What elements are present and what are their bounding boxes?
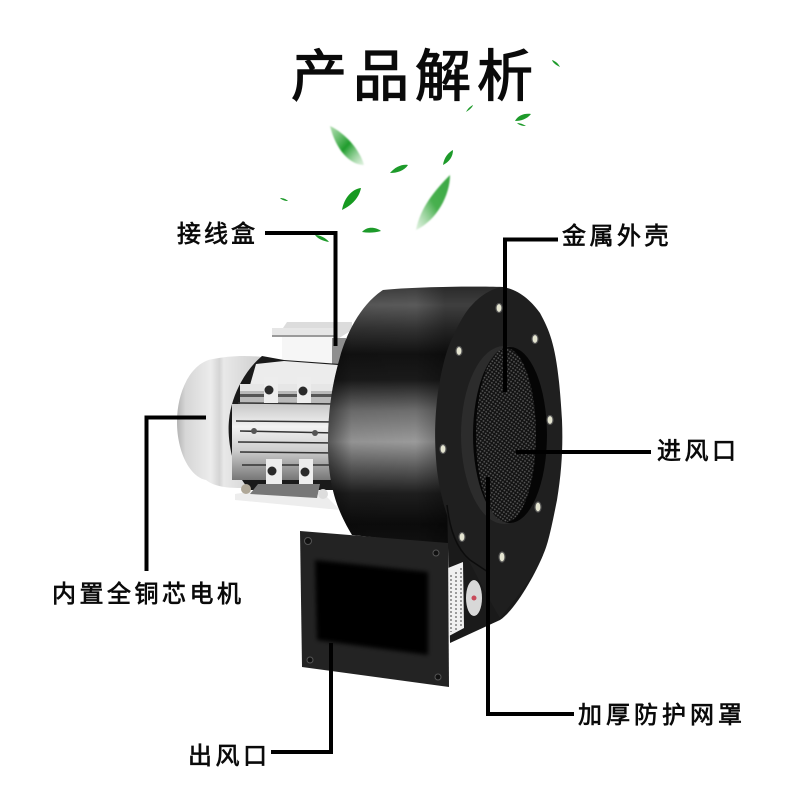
callout: 内置全铜芯电机	[52, 418, 244, 608]
green leaves	[280, 60, 560, 242]
callout: 出风口	[188, 643, 331, 770]
callout: 进风口: 进风口	[657, 438, 740, 465]
callout: 接线盒	[177, 221, 336, 346]
callout: 加厚防护网罩	[488, 477, 746, 729]
motor foot	[235, 484, 340, 510]
title: 产品解析	[291, 45, 539, 108]
blower housing	[328, 287, 562, 643]
bolts	[440, 304, 553, 562]
plate inner curve	[447, 505, 488, 572]
callout: 金属外壳	[505, 223, 672, 392]
side labels on housing	[448, 562, 482, 636]
terminal box	[272, 322, 352, 364]
fan cover	[177, 356, 262, 488]
outlet flange	[300, 531, 449, 687]
inlet recess	[461, 346, 547, 524]
housing body	[328, 287, 503, 570]
callout: 金属外壳: 金属外壳	[562, 223, 672, 250]
front plate	[435, 287, 562, 618]
lower scroll	[447, 500, 555, 643]
cooling fins	[229, 356, 340, 490]
callout: 加厚防护网罩: 加厚防护网罩	[578, 702, 746, 729]
motor	[177, 322, 352, 510]
callout: 出风口: 出风口	[188, 743, 270, 770]
outlet opening	[315, 560, 428, 655]
callout: 接线盒: 接线盒	[177, 221, 258, 248]
callout: 内置全铜芯电机: 内置全铜芯电机	[52, 581, 244, 608]
inlet mesh grill	[476, 348, 536, 522]
